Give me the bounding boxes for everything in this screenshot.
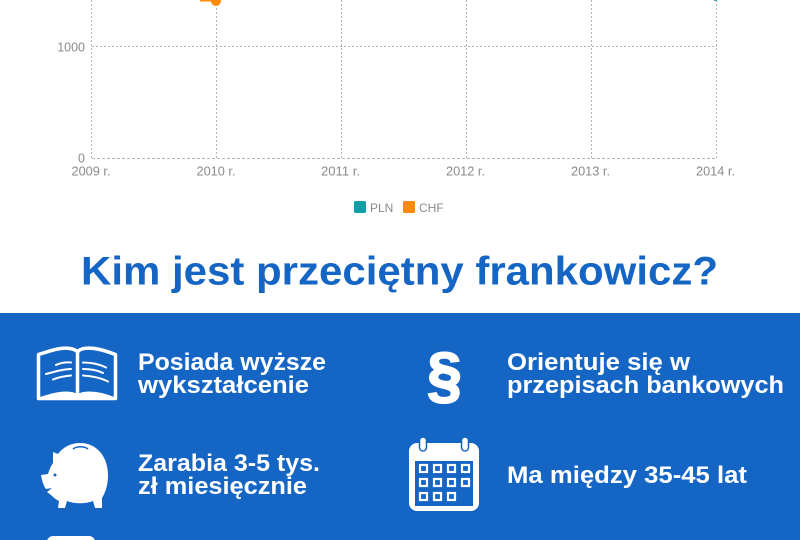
text: age: Ma między 35-45 lat <box>507 462 747 489</box>
x axis labels: 2011 r. <box>321 164 360 178</box>
y axis labels <box>57 40 85 166</box>
x axis labels: 2012 r. <box>446 164 485 178</box>
text: income: Zarabia 3-5 tys. <box>138 450 320 477</box>
text: income: zł miesięcznie <box>138 473 307 500</box>
panel: profile <box>0 313 800 540</box>
text: education: wykształcenie <box>137 372 309 399</box>
chart grid <box>92 0 717 158</box>
icon: calendar <box>409 437 479 511</box>
y axis labels: 1000 <box>57 40 85 54</box>
legend <box>354 201 444 215</box>
text: banking regulations: Orientuje się w <box>507 349 691 376</box>
icon: piggy bank <box>41 443 108 508</box>
legend: PLN <box>370 201 393 215</box>
text: banking regulations <box>507 349 784 399</box>
text: education: Posiada wyższe <box>138 349 326 376</box>
icon: cropped bottom item <box>47 536 95 540</box>
text: banking regulations: przepisach bankowych <box>507 372 784 399</box>
x axis labels: 2009 r. <box>72 164 110 178</box>
x axis labels: 2010 r. <box>196 164 236 178</box>
legend: CHF <box>419 201 444 215</box>
x axis labels: 2013 r. <box>571 164 610 178</box>
CHF series <box>200 0 221 6</box>
icon: paragraph sign: § <box>427 341 462 410</box>
line chart <box>57 0 735 215</box>
title: Kim jest przeciętny frankowicz? <box>81 250 718 294</box>
text: education <box>137 349 326 399</box>
text: income <box>138 450 320 500</box>
PLN series <box>714 0 718 1</box>
y axis labels: 0 <box>78 152 85 166</box>
x axis labels <box>72 164 735 178</box>
x axis labels: 2014 r. <box>696 164 735 178</box>
icon: open book <box>38 348 116 398</box>
